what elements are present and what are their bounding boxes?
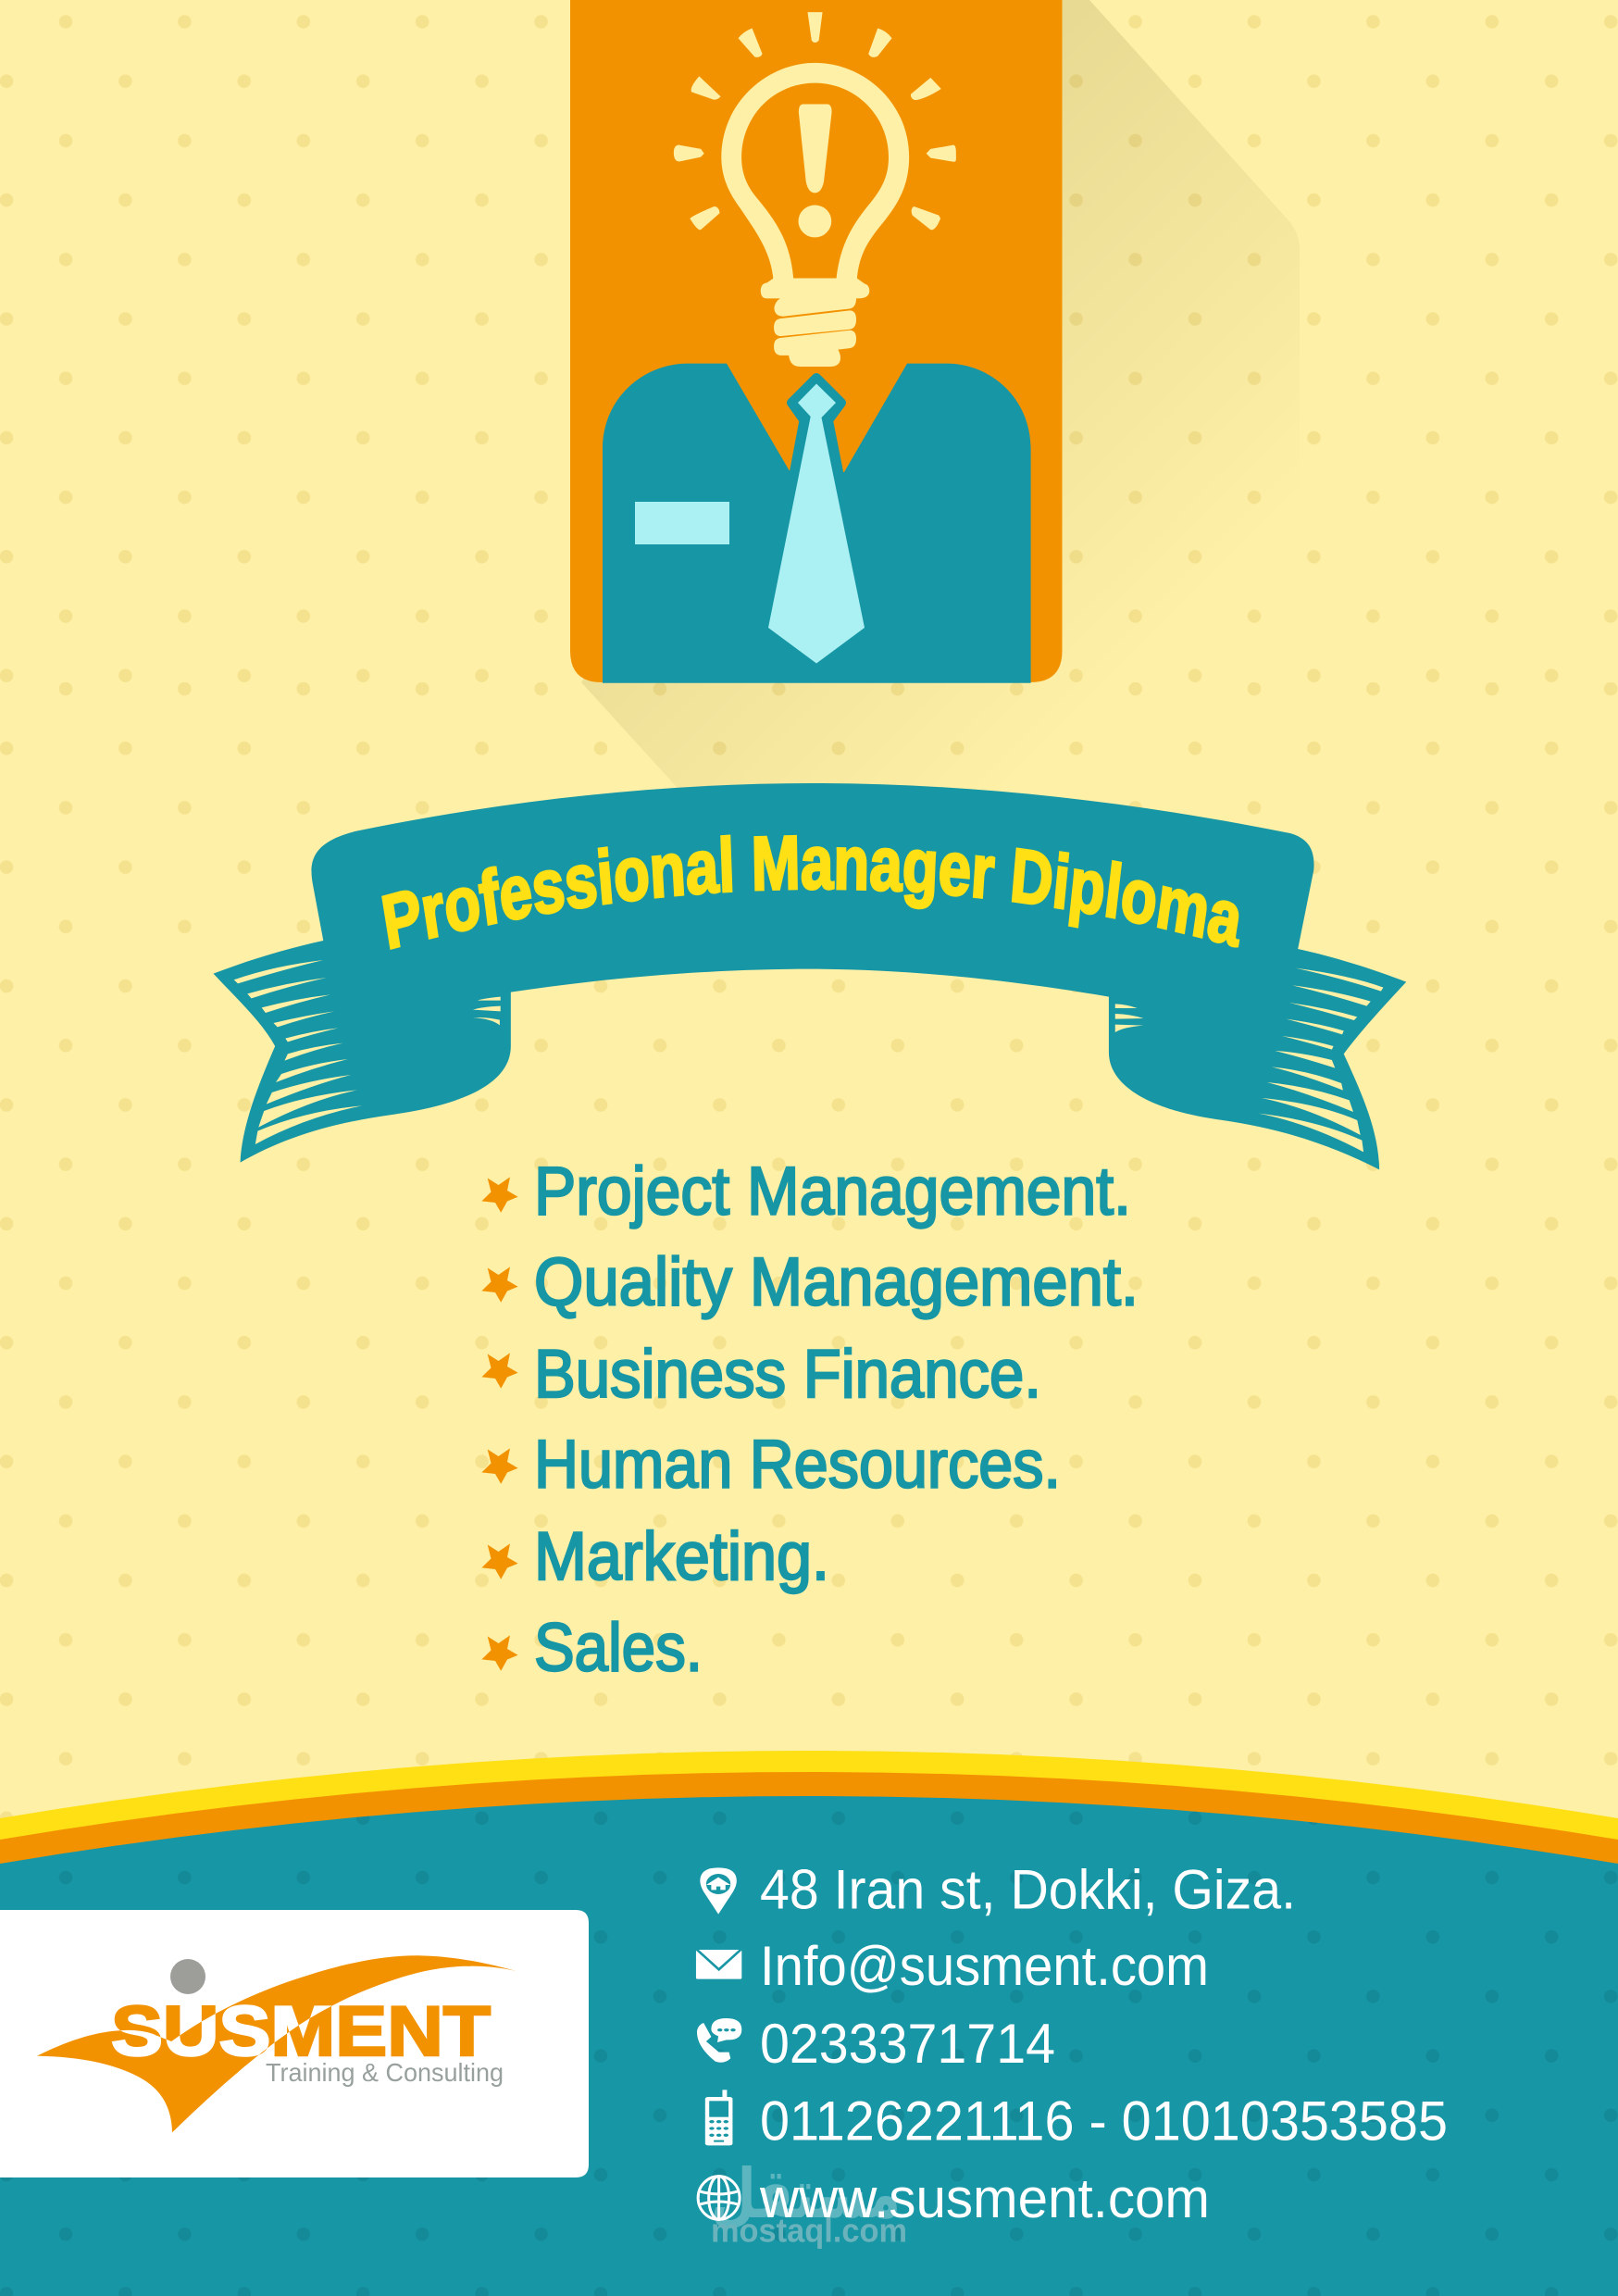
watermark: mostaql.com: [711, 2212, 907, 2250]
watermark: [711, 2154, 907, 2250]
list: diploma topics: [481, 1154, 1139, 1685]
contact: email: Info@susment.com: [760, 1935, 1209, 1997]
item: Quality Management: Quality Management.: [534, 1244, 1139, 1320]
icon: tie: [768, 378, 865, 663]
ribbon fold stripes: [234, 960, 1383, 1152]
contact: phone: 0233371714: [760, 2013, 1055, 2075]
logo wordmark: SUSMENT: [111, 1992, 491, 2071]
footer band: [0, 1751, 1618, 2296]
logo tagline: Training & Consulting: [266, 2058, 504, 2087]
contact details: [696, 1859, 1448, 2229]
panel: manager illustration card: [570, 0, 1063, 683]
item: Sales: Sales.: [534, 1611, 703, 1685]
ribbon banner: [213, 783, 1407, 1170]
panel: logo card: [0, 1910, 589, 2177]
contact: address: 48 Iran st, Dokki, Giza.: [760, 1859, 1296, 1921]
icon: light bulb with exclamation mark: [674, 12, 956, 367]
logo wordmark inside swoosh: SUSMENT: [111, 1992, 491, 2071]
item: Business Finance: Business Finance.: [534, 1337, 1041, 1412]
title: Professional Manager Diploma: [381, 835, 1240, 950]
contact: website: www.susment.com: [759, 2167, 1210, 2229]
watermark: مستقل: [711, 2154, 901, 2234]
item: Marketing: Marketing.: [534, 1519, 829, 1594]
long shadow of the card: [581, 0, 1300, 796]
name tag: [635, 502, 729, 544]
suit body: [603, 364, 1031, 683]
logo swoosh: [37, 1955, 517, 2132]
contact: mobile: 01126221116 - 01010353585: [760, 2090, 1448, 2152]
logo head: [170, 1959, 205, 1994]
item: Project Management: Project Management.: [534, 1154, 1131, 1229]
item: Human Resources: Human Resources.: [534, 1428, 1061, 1503]
